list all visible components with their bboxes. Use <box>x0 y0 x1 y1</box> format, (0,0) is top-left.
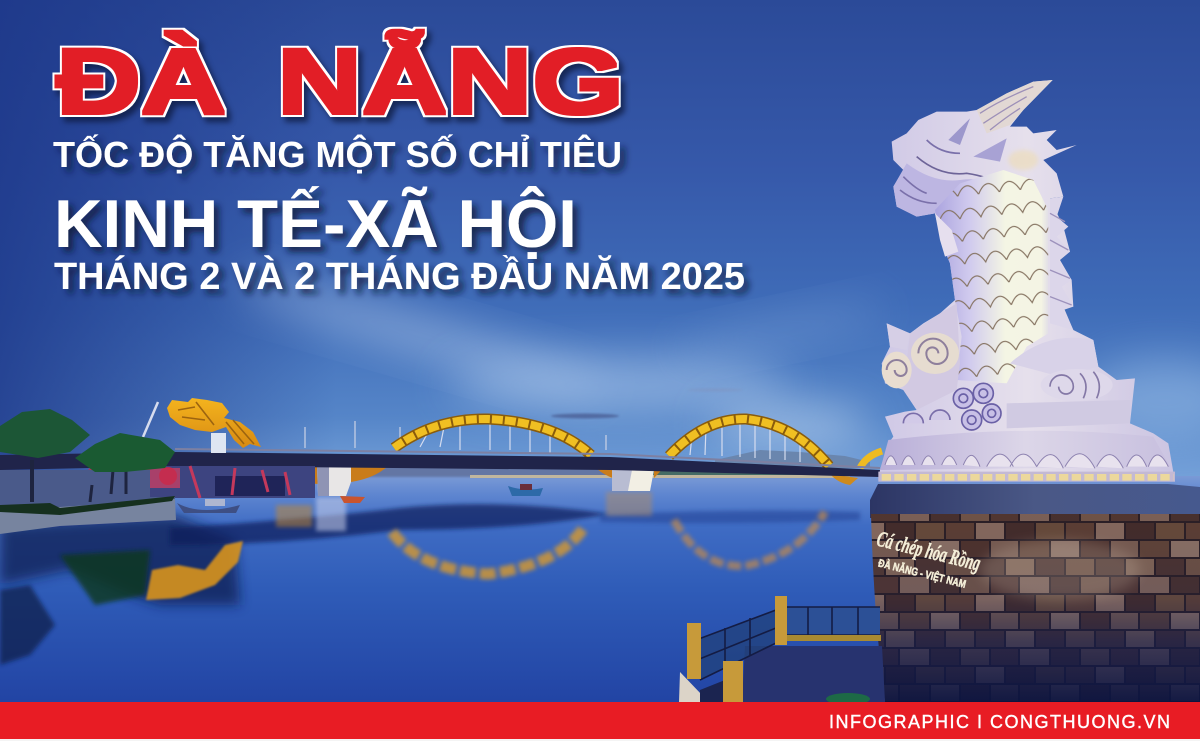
deck <box>0 452 880 477</box>
tree right <box>90 470 126 502</box>
subtitle line 2: KINH TẾ-XÃ HỘI <box>54 185 577 262</box>
dragon reflection <box>146 541 243 600</box>
riverside harbor and trees <box>0 409 543 534</box>
dragon head <box>167 398 261 448</box>
dark reflection of left bank <box>0 515 240 605</box>
pearl ring <box>878 472 1175 482</box>
engraved name <box>870 526 983 593</box>
dragon bridge <box>0 398 882 496</box>
crest shading <box>977 80 1053 133</box>
lower body swirl <box>1010 338 1098 377</box>
engraved name: Cá chép hóa Rồng <box>874 526 983 576</box>
boat small <box>340 496 365 503</box>
bridge stays and lamps <box>143 402 158 437</box>
dragon carp statue <box>878 80 1175 482</box>
harbor boats <box>150 466 315 498</box>
viewing terrace with railing <box>679 596 885 705</box>
terrace floor <box>742 646 885 702</box>
river water <box>0 476 1200 702</box>
arch reflections <box>392 526 585 574</box>
gold posts <box>687 623 701 679</box>
fish body <box>903 303 960 410</box>
body scales <box>933 167 1053 387</box>
fan fin <box>887 323 910 350</box>
fish tail curls <box>911 333 959 374</box>
piers <box>317 467 351 496</box>
neck flap <box>935 213 958 257</box>
tree left <box>30 460 34 502</box>
railing <box>696 610 776 680</box>
subtitle line 1: TỐC ĐỘ TĂNG MỘT SỐ CHỈ TIÊU <box>53 133 622 175</box>
far shore city <box>350 450 870 478</box>
dark ripple band <box>170 504 610 545</box>
pedestal cap <box>870 484 1200 518</box>
statue silhouette <box>878 80 1175 482</box>
lotus base <box>880 431 1170 470</box>
rock block <box>1007 400 1130 428</box>
horns <box>948 118 970 145</box>
head shade <box>893 163 1003 217</box>
boat moored <box>177 503 240 513</box>
headline text <box>53 133 745 298</box>
title: Đà Nẵng <box>56 30 624 133</box>
lit wall patch <box>980 540 1140 600</box>
gold ledge <box>787 635 881 641</box>
title: Đà Nẵng: ĐÀ <box>56 31 226 133</box>
left quay <box>0 470 175 514</box>
engraved name: ĐÀ NẴNG - VIỆT NAM <box>877 556 967 591</box>
footer credit: INFOGRAPHIC I CONGTHUONG.VN <box>829 712 1170 732</box>
subtitle line 3: THÁNG 2 VÀ 2 THÁNG ĐẦU NĂM 2025 <box>54 254 745 298</box>
pier reflections <box>316 497 346 531</box>
fins <box>1050 197 1073 330</box>
warm glow at neck <box>1008 150 1038 170</box>
under-deck arcs <box>264 466 318 484</box>
white side wall <box>679 672 702 702</box>
shrub <box>826 693 870 705</box>
footer bar <box>0 702 1200 741</box>
brick wall <box>871 514 1200 702</box>
sky background <box>0 0 1200 490</box>
title: Đà Nẵng: NẴNG <box>277 30 624 133</box>
stone pedestal <box>870 484 1200 702</box>
wave scroll <box>953 383 1001 430</box>
fishing boat <box>508 486 543 496</box>
white building <box>211 433 226 453</box>
arches <box>394 419 591 455</box>
